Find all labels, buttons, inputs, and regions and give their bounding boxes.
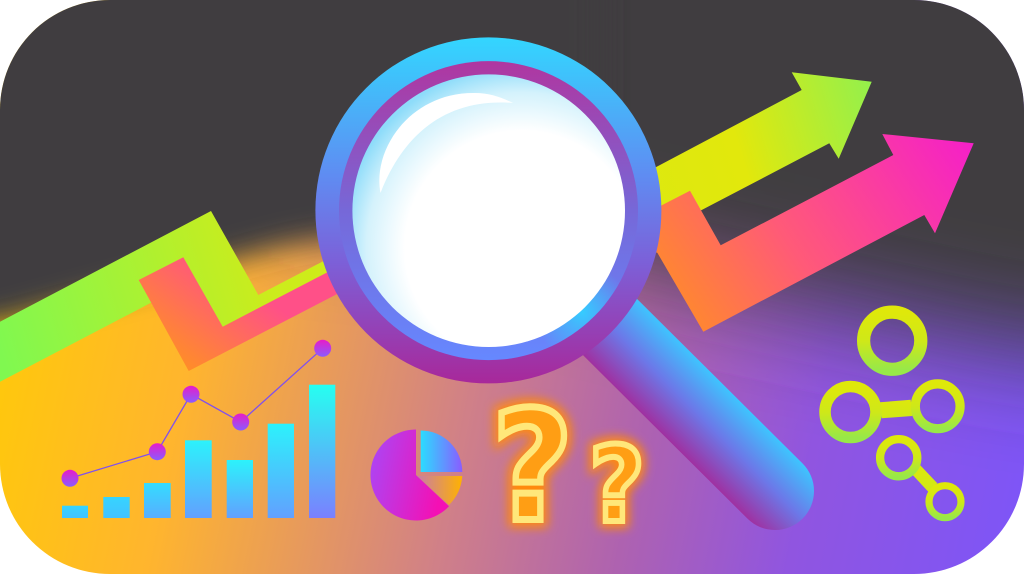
arrow: pink rising arrow <box>139 134 974 371</box>
icon: large question mark: ? <box>492 379 573 556</box>
pie chart <box>370 430 462 520</box>
lens highlight <box>379 93 513 193</box>
icon: magnifying glass <box>315 37 775 491</box>
arrow: green rising arrow <box>0 72 872 382</box>
magnifier lens <box>352 74 625 347</box>
bar chart <box>62 385 335 518</box>
line chart <box>62 340 331 487</box>
magnifier inner rim <box>339 61 638 360</box>
magnifier handle <box>611 328 775 491</box>
magnifier outer rim <box>315 37 661 383</box>
icon: large question mark: ? <box>492 379 573 556</box>
icon: small question mark: ? <box>589 424 645 546</box>
icon: small question mark: ? <box>589 424 645 546</box>
icon: network nodes <box>825 312 961 518</box>
